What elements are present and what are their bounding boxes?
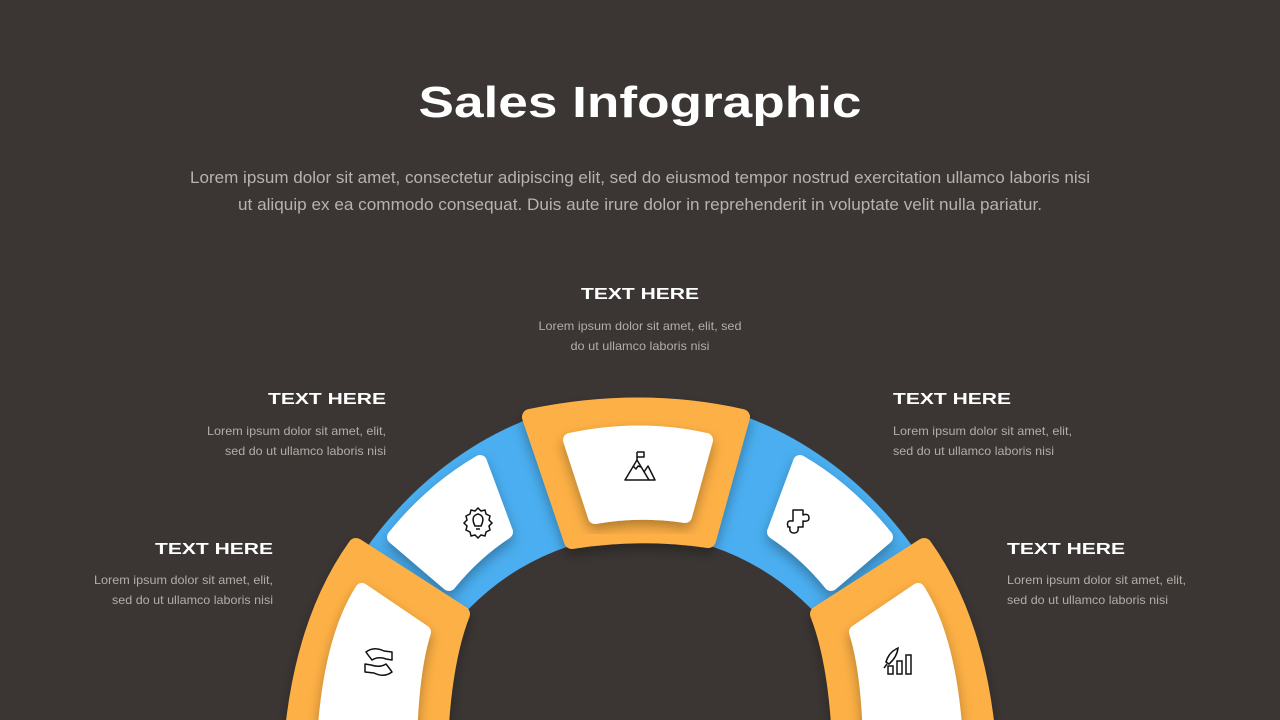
label: upper right xyxy=(893,391,1072,458)
label: lower right xyxy=(1007,541,1186,607)
blue card right xyxy=(774,462,886,584)
label: lower right: sed do ut ullamco laboris nisi xyxy=(1007,593,1168,607)
intro paragraph: ut aliquip ex ea commodo consequat. Duis aute irure dolor in reprehenderit in voluptate velit nulla pariatur. xyxy=(238,195,1042,214)
icon: hands exchange xyxy=(365,649,392,675)
arc diagram xyxy=(282,398,998,720)
white card top xyxy=(570,432,706,517)
label: top: Lorem ipsum dolor sit amet, elit, sed xyxy=(538,319,742,333)
label: top: TEXT HERE xyxy=(581,286,699,303)
white card right xyxy=(856,590,956,720)
label: upper right: Lorem ipsum dolor sit amet, elit, xyxy=(893,424,1072,438)
intro paragraph: Lorem ipsum dolor sit amet, consectetur adipiscing elit, sed do eiusmod tempor nostrud exercitation ullamco laboris nisi xyxy=(190,168,1090,187)
intro paragraph xyxy=(190,168,1090,214)
title: Sales Infographic xyxy=(418,78,862,127)
label: lower right: TEXT HERE xyxy=(1007,541,1125,558)
label: upper left: sed do ut ullamco laboris nisi xyxy=(225,444,386,458)
label: upper right: TEXT HERE xyxy=(893,391,1011,408)
label: lower left: TEXT HERE xyxy=(155,541,273,558)
blue ring xyxy=(282,398,998,720)
icon: puzzle xyxy=(788,510,809,533)
label: lower left: sed do ut ullamco laboris nisi xyxy=(112,593,273,607)
label: upper left xyxy=(207,391,386,458)
icon: rocket chart xyxy=(884,648,911,674)
orange segment left xyxy=(292,546,462,720)
label: upper right: sed do ut ullamco laboris nisi xyxy=(893,444,1054,458)
orange segment top xyxy=(530,406,742,541)
label: lower right: Lorem ipsum dolor sit amet, elit, xyxy=(1007,573,1186,587)
icon: lightbulb gear xyxy=(464,508,492,538)
label: lower left: Lorem ipsum dolor sit amet, elit, xyxy=(94,573,273,587)
label: top xyxy=(538,286,742,353)
icon: mountain flag xyxy=(625,452,655,480)
label: lower left xyxy=(94,541,273,607)
white card left xyxy=(324,590,424,720)
label: top: do ut ullamco laboris nisi xyxy=(570,339,710,353)
label: upper left: Lorem ipsum dolor sit amet, elit, xyxy=(207,424,386,438)
orange segment right xyxy=(818,546,988,720)
label: upper left: TEXT HERE xyxy=(268,391,386,408)
blue card left xyxy=(394,462,506,584)
